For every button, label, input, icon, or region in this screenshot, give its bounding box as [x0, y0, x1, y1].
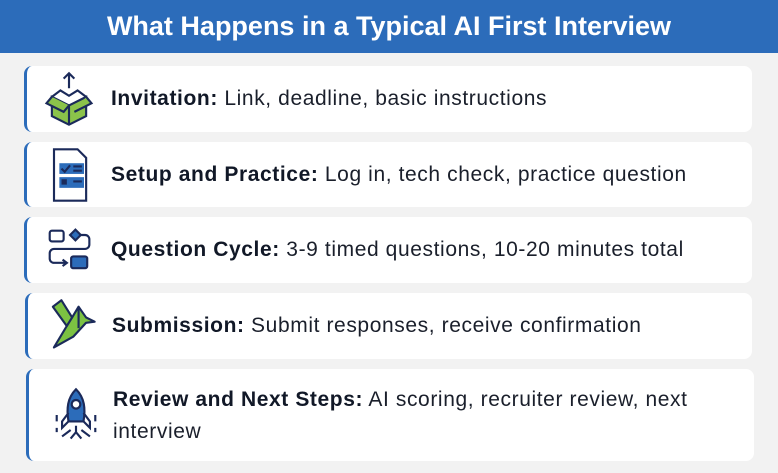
card: setup — [24, 142, 752, 207]
card: review — [26, 369, 754, 461]
card: question cycle — [24, 217, 752, 283]
text: Review and Next Steps: AI scoring, recruiter review, next interview — [113, 388, 688, 443]
text: Submission: Submit responses, receive confirmation — [112, 314, 642, 337]
title: What Happens in a Typical AI First Interview — [107, 11, 671, 41]
title — [0, 0, 778, 53]
text: Question Cycle: 3-9 timed questions, 10-20 minutes total — [111, 238, 684, 261]
card: submission — [25, 293, 752, 359]
icon: origami bird — [52, 299, 96, 348]
icon: flow — [48, 228, 90, 270]
icon: rocket — [56, 388, 96, 440]
card: invitation — [24, 66, 752, 132]
icon: box — [44, 72, 94, 126]
text: Invitation: Link, deadline, basic instructions — [111, 87, 547, 110]
text: Setup and Practice: Log in, tech check, practice question — [111, 163, 687, 186]
icon: checklist — [52, 148, 88, 202]
